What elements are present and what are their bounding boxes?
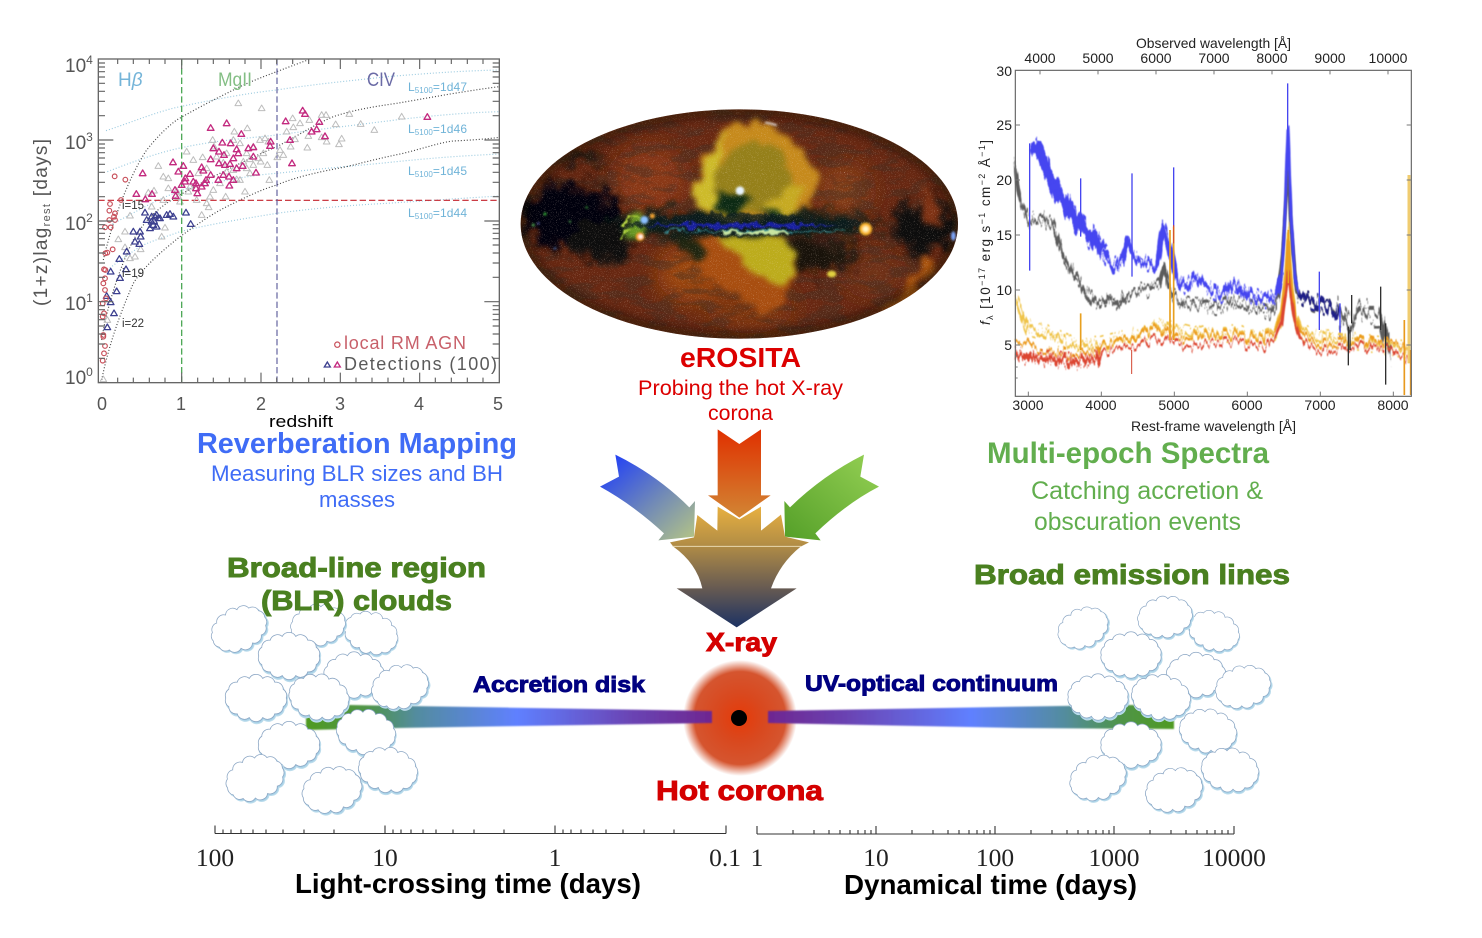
y axis title: cm (978, 187, 993, 211)
y axis title: λ (985, 315, 995, 320)
band labels: MgII (218, 70, 252, 91)
label: X-ray: X-ray (706, 627, 778, 657)
magnitude limit labels (122, 200, 144, 330)
legend (344, 333, 497, 374)
y axis tick labels (65, 53, 93, 389)
y axis tick labels: 10 (65, 214, 86, 235)
magnitude limit labels: i=19 (122, 268, 144, 280)
y axis tick labels: 0 (86, 365, 93, 379)
subtitle: multi-epoch spectra purpose (1031, 477, 1263, 536)
disk bar: right continuum (768, 705, 1174, 729)
luminosity curve labels (408, 80, 467, 221)
top axis labels: 6000 (1140, 50, 1172, 66)
clouds: left broad-line region (204, 596, 435, 822)
axis title: Light-crossing time (days) (295, 868, 641, 899)
label: Broad emission lines: Broad emission lines (974, 559, 1290, 590)
top axis labels: 10000 (1369, 50, 1408, 66)
label: Hot corona: Hot corona (656, 775, 823, 806)
bottom axis labels: 7000 (1304, 397, 1336, 413)
luminosity curve labels: =1d46 (433, 122, 467, 136)
top axis labels: 5000 (1082, 50, 1114, 66)
hot corona glow (683, 660, 797, 776)
y axis tick labels: 4 (86, 53, 93, 67)
panel: multi-epoch spectra plot (977, 35, 1411, 434)
subtitle: multi-epoch spectra purpose: Catching accretion & (1031, 477, 1263, 505)
luminosity curve labels: 5100 (415, 170, 433, 179)
x axis title: redshift (269, 413, 333, 431)
axis: dynamical time: 1000 (1088, 843, 1140, 872)
label: Accretion disk: Accretion disk (473, 672, 646, 697)
arrow: spectra green (784, 455, 879, 540)
top axis labels (1024, 50, 1408, 66)
disk bar: left accretion disk (306, 705, 712, 730)
axis title: Dynamical time (days) (844, 869, 1137, 900)
heading: Multi-epoch Spectra: Multi-epoch Spectra (987, 437, 1269, 470)
y axis title: −17 (977, 268, 987, 286)
x axis tick labels: 1 (176, 394, 186, 414)
luminosity curve labels: L (408, 122, 415, 136)
label: UV-optical continuum: UV-optical continuum (805, 671, 1058, 696)
y axis title: ] (978, 140, 993, 144)
bottom axis labels: 6000 (1231, 397, 1263, 413)
spectrum: blue epoch (1031, 130, 1340, 317)
y axis title: erg s (978, 225, 993, 266)
luminosity curve labels: L (408, 80, 415, 94)
y axis tick labels: 25 (996, 117, 1012, 133)
panel: reverberation mapping lag vs redshift plot (31, 53, 503, 431)
band labels (118, 70, 395, 91)
black hole (731, 710, 747, 726)
top axis labels: 4000 (1024, 50, 1056, 66)
subtitle: reverberation mapping purpose (211, 461, 503, 512)
axis: light-crossing time (196, 826, 741, 899)
bottom axis labels: 3000 (1012, 397, 1044, 413)
y axis title: Å (978, 158, 993, 172)
subtitle: eROSITA purpose: corona (708, 402, 773, 425)
axis: dynamical time: 1 (751, 843, 763, 872)
bottom axis title: Rest-frame wavelength [Å] (1131, 418, 1296, 434)
y axis tick labels: 2 (86, 211, 93, 225)
subtitle: eROSITA purpose (638, 377, 844, 425)
y axis title: [days] (31, 139, 52, 203)
subtitle: multi-epoch spectra purpose: obscuration events (1034, 508, 1241, 536)
bottom axis labels: 4000 (1085, 397, 1117, 413)
arrow: eROSITA red (708, 429, 771, 518)
luminosity curve labels: L (408, 164, 415, 178)
axis: light-crossing time: 1 (549, 843, 561, 872)
y axis title: f (978, 320, 993, 325)
arrow: reverberation blue (600, 455, 695, 540)
y axis tick labels: 1 (86, 291, 93, 305)
axis: dynamical time (751, 826, 1266, 900)
magnitude limit labels: i=15 (122, 200, 144, 212)
label: Broad-line region (BLR) clouds: (BLR) clouds (261, 585, 452, 616)
luminosity curve labels: 5100 (415, 86, 433, 95)
magnitude limit labels: i=22 (122, 318, 144, 330)
axis: light-crossing time: 100 (196, 843, 234, 872)
y axis tick labels: 30 (996, 63, 1012, 79)
y axis title: −1 (977, 213, 987, 224)
y axis tick labels (996, 63, 1012, 353)
luminosity curve labels: L (408, 206, 415, 220)
legend: Detections (100) (344, 354, 497, 374)
spectra curves and frame (1015, 70, 1411, 396)
subtitle: reverberation mapping purpose: masses (319, 487, 395, 512)
label: Broad-line region (BLR) clouds: Broad-line region (227, 552, 486, 583)
y axis title: (1+z)lag (31, 228, 52, 306)
band labels: Hβ (118, 70, 143, 91)
axis: dynamical time: 100 (976, 843, 1014, 872)
y axis tick labels: 10 (65, 294, 86, 315)
y axis title: [10 (978, 287, 993, 314)
x axis tick labels: 3 (335, 394, 345, 414)
subtitle: eROSITA purpose: Probing the hot X-ray (638, 377, 844, 400)
label: Broad-line region (BLR) clouds (227, 552, 486, 616)
y axis title: −1 (977, 145, 987, 157)
y axis title: −2 (977, 174, 987, 185)
bottom axis labels (1012, 397, 1409, 413)
luminosity curve labels: 5100 (415, 128, 433, 137)
band labels: CIV (367, 70, 395, 91)
y axis tick labels: 10 (65, 368, 86, 389)
legend: local RM AGN (344, 333, 466, 353)
spectrum: red epoch (1015, 270, 1408, 362)
x axis tick labels (97, 394, 503, 414)
top axis labels: 8000 (1256, 50, 1288, 66)
scatter plot data and frame (98, 59, 499, 383)
subtitle: reverberation mapping purpose: Measuring BLR sizes and BH (211, 461, 503, 486)
bottom axis labels: 8000 (1377, 397, 1409, 413)
top axis labels: 9000 (1314, 50, 1346, 66)
axis: dynamical time: 10 (863, 843, 889, 872)
luminosity curve labels: =1d44 (433, 206, 467, 220)
y axis tick labels: 20 (996, 172, 1012, 188)
y axis tick labels: 10 (996, 282, 1012, 298)
y axis title: rest (41, 204, 53, 226)
arrows: converging into X-ray (600, 429, 879, 627)
x axis tick labels: 0 (97, 394, 107, 414)
arrow: combined downward (670, 507, 809, 627)
clouds: right broad-line region (1051, 591, 1277, 821)
luminosity curve labels: 5100 (415, 212, 433, 221)
x axis tick labels: 5 (493, 394, 503, 414)
y axis tick labels: 10 (65, 133, 86, 154)
y axis tick labels: 3 (86, 130, 93, 144)
x axis tick labels: 4 (414, 394, 424, 414)
top axis title: Observed wavelength [Å] (1136, 35, 1291, 51)
y axis tick labels: 10 (65, 56, 86, 77)
x axis tick labels: 2 (256, 394, 266, 414)
spectrum: orange epoch (1015, 237, 1407, 355)
spectrum: yellow epoch (1016, 230, 1408, 350)
y axis tick labels: 15 (996, 227, 1012, 243)
spectrum: grey epoch (1015, 163, 1390, 353)
heading: eROSITA: eROSITA (680, 342, 801, 373)
luminosity curve labels: =1d47 (433, 80, 467, 94)
top axis labels: 7000 (1198, 50, 1230, 66)
y axis tick labels: 5 (1004, 337, 1012, 353)
axis: dynamical time: 10000 (1202, 843, 1266, 872)
heading: Reverberation Mapping: Reverberation Mapping (197, 428, 517, 460)
image: eROSITA all-sky X-ray map (520, 109, 958, 339)
axis: light-crossing time: 10 (372, 843, 398, 872)
luminosity curve labels: =1d45 (433, 164, 467, 178)
bottom axis labels: 5000 (1158, 397, 1190, 413)
axis: light-crossing time: 0.1 (709, 843, 741, 872)
